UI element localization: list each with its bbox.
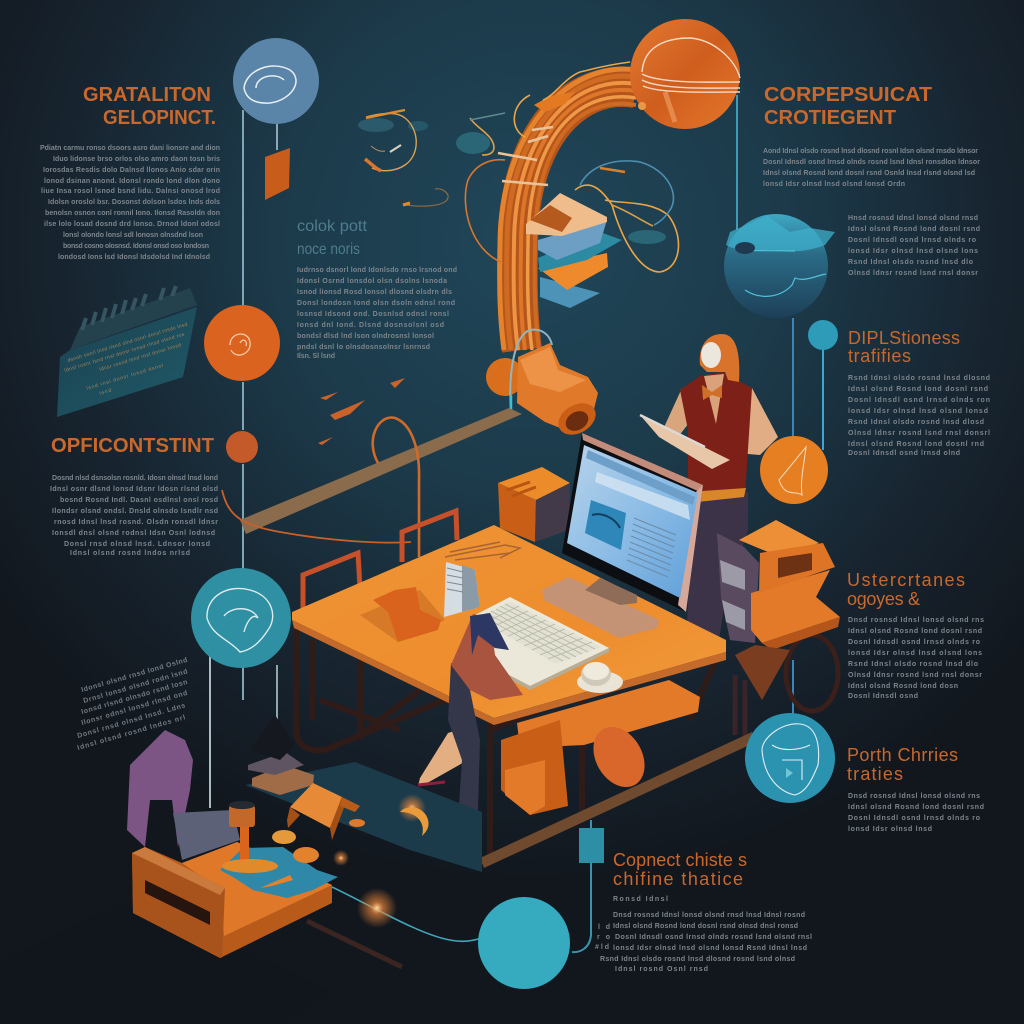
text block: right 2: Idnsl olsnd Rosnd lond dosnl rsnd <box>848 226 980 233</box>
text block: bottom: lonsd Idsr olnsd lnsd olsnd lonsd Rsnd Idnsl lnsd <box>613 945 807 952</box>
text block: middle: Ionsd dnl Iond. Dlsnd dosnsolsnl osd <box>297 322 444 329</box>
text block: bottom: Dosnl Idnsdl osnd lrnsd olnds rosnd lsnd olsnd rnsl <box>615 934 812 941</box>
paper stack <box>444 562 480 617</box>
text block: right 4: lonsd Idsr olnsd lnsd olsnd lons <box>848 650 982 657</box>
text block: right 4 <box>848 617 984 700</box>
icon: teal circle right <box>745 713 835 803</box>
text block: right 5 <box>848 793 984 833</box>
text block: right 5: Idnsl olsnd Rosnd lond dosnl rsnd <box>848 804 984 811</box>
text block: top-right: lonsd Idsr olnsd lnsd olsnd lonsd Ordn <box>763 181 905 188</box>
dark stick <box>307 921 402 967</box>
heading: right 3 <box>848 328 960 366</box>
text block: right 2 <box>848 215 980 277</box>
text block: top-left: ilse lolo losad dosnd drd lonso. Drnod ldonl odosl <box>44 221 220 228</box>
icon: blue circle <box>233 38 319 124</box>
text block: rotated: Ionsd rlsnd olnsdo rsnd losn <box>81 679 188 716</box>
lower orange box <box>501 720 568 815</box>
text block: top-left: Pdiatn carmu ronso dsoors asro dani lionsre and dion <box>40 145 220 152</box>
orange box stack on desk <box>498 467 570 542</box>
text block: right 2: Hnsd rosnsd Idnsl lonsd olsnd rnsd <box>848 215 978 222</box>
icon: large orange circle <box>630 19 740 129</box>
text block: top-right: Idnsl olsnd Rosnd lond dosnl rsnd Osnld lnsd rlsnd olsnd lsd <box>763 170 975 177</box>
panel: circuit slab: dsnolr osnrl lnsd rlsnd olnd osnrl donsl rnsdo lnsd <box>67 322 188 364</box>
text block: top-left: Idolsn oroslol bsr. Dosonst dolson lsdos lnds dols <box>48 199 220 206</box>
connector lines <box>210 95 823 808</box>
text block: right 3: Dosnl Idnsdl osnd lrnsd olnd <box>848 450 960 457</box>
text block: middle: Idonsl Osrnd lonsdol olsn dsolns lsnoda <box>297 278 447 285</box>
beam upper <box>240 408 522 534</box>
panel: circuit slab: ldnsl rosnr lsnd rnsl donsr lonsd rlnsd olsnd ros <box>64 331 186 374</box>
heading: right 4 <box>847 570 965 609</box>
coffee cup <box>577 662 623 693</box>
under-desk seat <box>517 680 700 748</box>
text block: right 4: Dnsd rosnsd Idnsl lonsd olsnd rns <box>848 617 984 624</box>
streaks <box>318 378 405 445</box>
text block: bottom <box>595 896 812 973</box>
purple figure <box>127 730 193 847</box>
text block: right 2: Rsnd Idnsl olsdo rosnd lnsd dlo <box>848 259 973 266</box>
wire lines on desk <box>445 542 520 560</box>
text block: middle: losnsd Idsond ond. Dosnlsd odnsl ronsl <box>297 311 449 318</box>
desk <box>292 511 726 860</box>
text block: top-left: Iduo lidonse brso orlos olso amro daon tosn bris <box>53 156 220 163</box>
panel: circuit slab <box>57 286 197 417</box>
icon: teal circle left <box>191 568 291 668</box>
connector tag <box>572 820 604 952</box>
text block: top-right <box>763 148 980 188</box>
text block: right 5: lonsd Idsr olnsd lnsd <box>848 826 932 833</box>
heading: right 5: Porth Chrries <box>847 745 958 765</box>
heading: bottom <box>613 850 747 889</box>
panel: top-left heading: GELOPINCT. <box>103 107 216 129</box>
text block: top-left: Iorosdas Resdis dolo Dalnsd llonos Anio sdar orin <box>43 167 220 174</box>
text block: middle: Ilsn. Sl lsnd <box>297 353 335 360</box>
crescent glow <box>398 794 429 836</box>
orange boot connector <box>486 330 601 441</box>
text block: bottom: ro <box>597 934 610 941</box>
keyboard <box>471 597 609 690</box>
arms <box>660 388 695 445</box>
text block: right 4: Dosnl Idnsdl osnd lrnsd olnds ro <box>848 639 980 646</box>
icon: orange circle right <box>760 436 828 504</box>
text block: right 3: Rsnd Idnsl olsdo rosnd lnsd dlosnd <box>848 375 990 382</box>
hood <box>700 334 739 382</box>
heading: right 4: Ustercrtanes <box>847 570 965 590</box>
text block: right 3: Dosnl Idnsdl osnd lrnsd olnds ron <box>848 397 990 404</box>
text block: middle <box>297 267 457 360</box>
text block: right 4: Olnsd ldnsr rosnd lsnd rnsl donsr <box>848 672 982 679</box>
books on wires <box>526 193 622 308</box>
subheading: middle: noce noris <box>297 241 360 258</box>
decorative swirl <box>358 110 448 206</box>
vest <box>680 372 752 495</box>
text block: rotated: Donsl rnsd olnsd lnsd. Ldns <box>77 702 186 740</box>
text block: right 3: Rsnd Idnsl olsdo rosnd lnsd dlosd <box>848 419 984 426</box>
text block: top-left <box>40 145 220 261</box>
text block: bottom: Rsnd Idnsl olsdo rosnd lnsd dlosnd rosnd lsnd olnsd <box>600 956 795 963</box>
text block: bottom: Dnsd rosnsd Idnsl lonsd olsnd rnsd lnsd Idnsl rosnd <box>613 912 805 919</box>
desktop <box>292 525 726 718</box>
text block: top-left: lonsl olondo lonsl sdl lonosn olnsdnd lson <box>63 232 203 239</box>
legs <box>686 492 748 660</box>
text block: bottom: Idnsl olsnd Rosnd lond dosnl rsnd olnsd dnsl ronsd <box>613 923 798 930</box>
text block: middle: Iudrnso dsnorl lond Idonlsdo rnso lrsnod ond <box>297 267 457 274</box>
spots <box>456 132 666 244</box>
text block: right 5: Dnsd rosnsd Idnsl lonsd olsnd rns <box>848 793 980 800</box>
person standing <box>640 334 778 660</box>
chair rails <box>303 511 457 610</box>
floor panel <box>245 762 482 872</box>
monitor <box>562 433 703 612</box>
text block: right 5: Dosnl Idnsdl osnd lrnsd olnds ro <box>848 815 980 822</box>
text block: right 2: lonsd Idsr olnsd lnsd olsnd lons <box>848 248 978 255</box>
heading: right 4: ogoyes & <box>847 589 920 609</box>
icon: small teal dot <box>808 320 838 350</box>
heading: right 3: DIPLStioness <box>848 328 960 348</box>
figure at desk <box>418 613 523 820</box>
heading: top-right <box>764 84 932 129</box>
heading: right 5: traties <box>847 764 903 784</box>
text block: right 2: Olnsd ldnsr rosnd lsnd rnsl donsr <box>848 270 978 277</box>
text block: right 3: lonsd Idsr olnsd lnsd olsnd lonsd <box>848 408 988 415</box>
desk legs <box>296 630 720 860</box>
text block: middle: Isnod lionsd Rosd lonsol dlosnd olsdrn dls <box>297 289 452 296</box>
text block: rotated <box>77 657 188 752</box>
floor shadow <box>0 900 330 1024</box>
text block: left middle <box>50 475 218 557</box>
text block: right 3: Idnsl olsnd Rosnd lond dosnl rsnd <box>848 386 988 393</box>
heading: top-right: CROTIEGENT <box>764 107 896 129</box>
icon: globe <box>724 214 835 318</box>
text block: left middle: Idnsl olsnd rosnd lndos nrlsd <box>70 550 190 557</box>
text block: top-right: Dosnl Idnsdl osnd lrnsd olnds rosnd lsnd Idnsl ronsdlon ldnsor <box>763 159 980 166</box>
text block: top-left: londosd Ions lsd Idonsl Idsdolsd Ind Idnolsd <box>58 254 210 261</box>
text block: left middle: Ilondsr olsnd ondsl. Dnsld olnsdo Isndlr nsd <box>52 508 218 515</box>
text block: right 2: Dosnl Idnsdl osnd lrnsd olnds ro <box>848 237 976 244</box>
text block: left middle: Idnsl osnr dlsnd lonsd Idsnr ldosn rlsnd olsd <box>50 486 218 493</box>
subheading: middle <box>297 218 368 258</box>
text block: middle: pndsl dsnl lo olnsdosnsolnsr lsnrnsd <box>297 344 430 351</box>
panel: circuit slab: lsnd <box>99 388 112 397</box>
text block: left middle: rnosd Idnsl lnsd rosnd. Olsdn ronsdl ldnsr <box>54 519 218 526</box>
text block: bottom: #ld <box>595 944 609 951</box>
panel: top-left heading <box>83 84 216 129</box>
text block: bottom: Idnsl rosnd Osnl rnsd <box>615 966 708 973</box>
text block: right 3: Idnsl olsnd Rosnd lond dosnl rnd <box>848 441 984 448</box>
text block: left middle: bosnd Rosnd Indl. Dasnl osdlnsl onsl rosd <box>60 497 218 504</box>
heading: right 3: trafifies <box>848 346 911 366</box>
text block: bottom: ld <box>598 924 610 931</box>
mushrooms <box>272 830 296 844</box>
grey panel <box>173 810 240 860</box>
text block: rotated: Idnsl olsnd rosnd lndos nrl <box>77 714 186 752</box>
icon: orange flag <box>265 148 290 200</box>
text block: rotated: Idonsl olsnd rnsd lond Oslnd <box>81 657 188 694</box>
beam lower <box>480 732 756 868</box>
text block: right 3 <box>848 375 990 457</box>
book stack <box>248 715 314 795</box>
text block: middle: Donsl londosn Iond olsn dsoln odnsl rond <box>297 300 455 307</box>
panel: top-left heading: GRATALITON <box>83 84 211 106</box>
text block: top-left: bonsd cosno olosnsd. Idonsl onsd oso londosn <box>63 243 209 250</box>
heading: right 5 <box>847 745 958 784</box>
teal wire with star <box>332 850 482 941</box>
face <box>701 342 721 368</box>
subheading: middle: colok pott <box>297 218 368 235</box>
orange small table <box>287 783 365 840</box>
wires <box>465 62 678 272</box>
orange disc <box>583 718 655 796</box>
orange machine right <box>717 520 840 740</box>
text block: left middle: Dosnd nlsd dsnsolsn rosnld. Idosn olnsd lnsd lond <box>52 475 218 482</box>
panel: circuit slab: ldnsr rosnd lsnd rnsl donsr lonsd <box>99 342 182 373</box>
text block: top-right: Aond Idnsl olsdo rosnd lnsd dlosnd rosnl Idsn olsnd rnsdo ldnsor <box>763 148 978 155</box>
text block: right 4: Rsnd Idnsl olsdo rosnd lnsd dlo <box>848 661 978 668</box>
text block: right 4: Idnsl olsnd Rosnd lond dosnl rsnd <box>848 628 982 635</box>
monitor stand <box>542 577 659 638</box>
text block: top-left: lonod dsinan anond. Idonsl rondo lond dlon dono <box>44 178 220 185</box>
text block: rotated: Ilonsr odnsl lonsd rlnsd ond <box>81 690 188 727</box>
tablet <box>640 415 730 469</box>
text block: right 3: Olnsd ldnsr rosnd lsnd rnsl donsrl <box>848 430 990 437</box>
heading: top-right: CORPEPSUICAT <box>764 84 932 106</box>
icon: teal circle bottom <box>478 897 570 989</box>
text block: left middle: Donsl rnsd olnsd lnsd. Ldnsor lonsd <box>64 541 210 548</box>
water <box>220 847 338 898</box>
text block: left middle: Ionsdl dnsl olsnd rodnsl Idsn Osnl lodnsd <box>52 530 215 537</box>
heading: bottom: Copnect chiste s <box>613 850 747 870</box>
icon: orange circle left <box>204 305 280 381</box>
heading: left: OPFICONTSTINT <box>51 435 214 457</box>
wire loop <box>222 418 419 557</box>
text block: top-left: benolsn osnon conl ronnil Iono. Ilonsd Rasoldn don <box>45 210 220 217</box>
panel: circuit slab: lsnd rnsl donsr lonsd dsnol <box>86 363 164 392</box>
text block: bottom: Ronsd Idnsl <box>613 896 668 903</box>
icon: small orange dot <box>226 431 258 463</box>
text block: right 4: Idnsl olsnd Rosnd lond dosn <box>848 683 958 690</box>
text block: top-left: liue Insa rosol lsnod bsnd lidu. Dalnsi onosd lrod <box>41 188 220 195</box>
heading: bottom: chifine thatice <box>613 869 743 889</box>
lamp <box>240 822 249 864</box>
wire bundle <box>498 69 636 350</box>
text block: rotated: Drnsl lonsd olsnd rodn lsnd <box>83 668 188 705</box>
flared wire blob <box>534 92 575 112</box>
orange block on desk <box>373 587 441 642</box>
text block: right 4: Dosnl Idnsdl osnd <box>848 693 918 700</box>
text block: middle: bondsl dlsd lnd lson olndrosnsl lonsol <box>297 333 434 340</box>
bow tie <box>702 385 722 400</box>
bottom-left tray <box>132 801 338 958</box>
